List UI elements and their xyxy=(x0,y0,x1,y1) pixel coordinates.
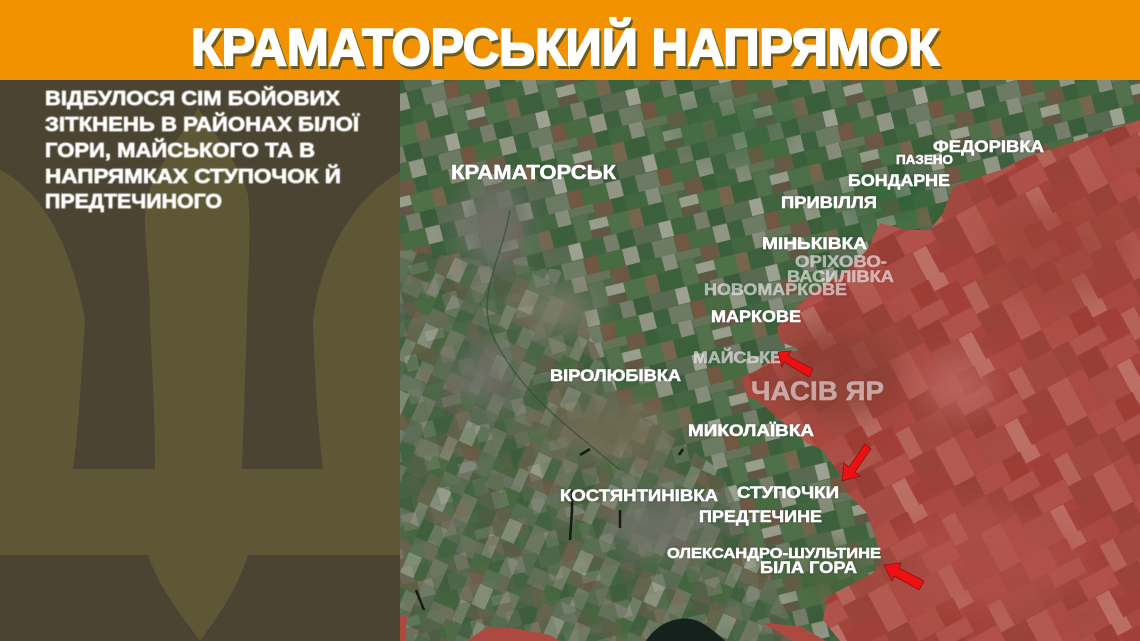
label: Fedorivka: ФЕДОРІВКА xyxy=(933,137,1044,156)
text block: summary: ГОРИ, МАЙСЬКОГО ТА В xyxy=(45,138,315,162)
label: Pryvillia: ПРИВІЛЛЯ xyxy=(781,193,877,212)
arrow: Stupochky xyxy=(842,444,871,481)
label: Chasiv Yar: ЧАСІВ ЯР xyxy=(751,376,884,406)
label: Orikhovo-Vasylivka xyxy=(787,252,894,286)
label: Novomarkove: НОВОМАРКОВЕ xyxy=(704,280,847,299)
label: Bondarne: БОНДАРНЕ xyxy=(848,171,950,190)
map labels xyxy=(451,137,1044,577)
label: Maiske: МАЙСЬКЕ xyxy=(693,348,782,367)
label: Pazeno: ПАЗЕНО xyxy=(896,153,953,167)
label: Minkivka: МІНЬКІВКА xyxy=(762,234,867,253)
header bar xyxy=(0,0,1140,80)
label: Markove: МАРКОВЕ xyxy=(711,307,801,326)
text block: summary: ЗІТКНЕНЬ В РАЙОНАХ БІЛОЇ xyxy=(45,112,360,136)
label: Oleksandro-Shultyne: ОЛЕКСАНДРО-ШУЛЬТИНЕ xyxy=(667,545,881,562)
occupied territory zone xyxy=(740,120,1140,641)
arrow: Maiske xyxy=(778,351,813,377)
label: Orikhovo-Vasylivka: ВАСИЛІВКА xyxy=(787,267,894,286)
label: Bila Hora: БІЛА ГОРА xyxy=(760,558,857,577)
label: Mykolaivka: МИКОЛАЇВКА xyxy=(688,421,814,440)
label: Kostiantynivka: КОСТЯНТИНІВКА xyxy=(560,486,718,505)
rivers and reservoir xyxy=(414,210,725,641)
label: Virolyubivka: ВІРОЛЮБІВКА xyxy=(550,366,681,385)
left panel background xyxy=(0,80,400,641)
label: Orikhovo-Vasylivka: ОРІХОВО- xyxy=(795,252,887,271)
contrast-softening wash xyxy=(400,80,1140,641)
text block: summary: НАПРЯМКАХ СТУПОЧОК Й xyxy=(45,164,341,188)
arrow: Bila Hora xyxy=(884,563,924,590)
occupied strips at bottom xyxy=(400,615,826,641)
label: Kramatorsk: КРАМАТОРСЬК xyxy=(451,162,617,184)
title: КРАМАТОРСЬКИЙ НАПРЯМОК xyxy=(193,21,941,80)
label: Predtechyne: ПРЕДТЕЧИНЕ xyxy=(699,507,822,526)
text block: summary: ПРЕДТЕЧИНОГО xyxy=(45,191,222,213)
label: Stupochky: СТУПОЧКИ xyxy=(737,483,839,502)
text block: summary xyxy=(45,86,360,213)
title: КРАМАТОРСЬКИЙ НАПРЯМОК xyxy=(191,18,939,77)
icon: trident watermark xyxy=(0,108,400,641)
satellite map xyxy=(400,80,1140,641)
city areas xyxy=(455,100,930,600)
text block: summary: ВІДБУЛОСЯ СІМ БОЙОВИХ xyxy=(45,86,341,110)
